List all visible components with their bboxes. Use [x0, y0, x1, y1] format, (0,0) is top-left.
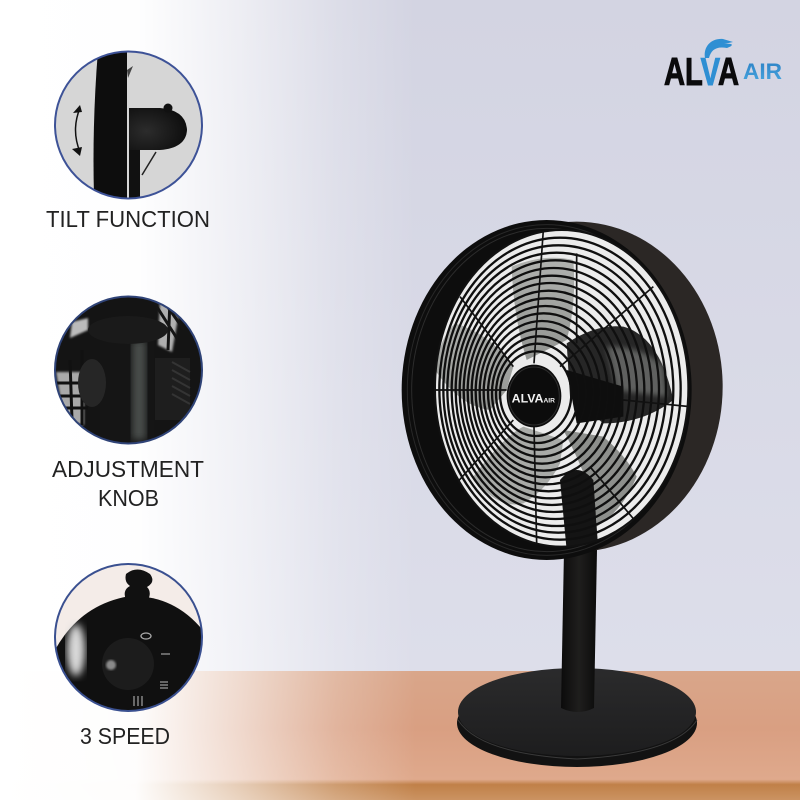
feature: tilt function: [46, 47, 210, 232]
label: 3 speed: 3 SPEED: [80, 723, 170, 749]
fan stem: [561, 550, 597, 712]
logo word ALVA: ALVA: [664, 51, 739, 94]
blade: bottom: [473, 427, 563, 504]
fan head: [402, 220, 723, 560]
fan grille rim: [435, 230, 688, 547]
logo word AIR: AIR: [743, 59, 782, 84]
icon: speed dial photo: [54, 563, 203, 712]
label: adjustment knob: [52, 456, 204, 511]
feature: 3 speed: [50, 564, 210, 749]
logo swoosh: [705, 39, 733, 58]
hub logo: ALVAAIR: [512, 392, 555, 406]
logo: Alva Air: [664, 39, 782, 94]
blade: lower right: [563, 430, 637, 527]
blade: top: [512, 258, 574, 360]
blade: left: [435, 323, 513, 410]
blade: right (shadowed): [567, 326, 673, 423]
feature: adjustment knob: [52, 296, 204, 511]
grille spokes: [430, 230, 690, 543]
icon: knob photo: [54, 296, 202, 445]
rear motor: [560, 470, 598, 550]
grille rings: [439, 238, 681, 540]
fan base: [457, 668, 697, 767]
label: adjustment knob: ADJUSTMENT: [52, 456, 204, 482]
fan rear housing: [431, 222, 723, 552]
fan hub: [507, 365, 561, 427]
product: fan: [402, 220, 723, 767]
icon: tilt photo: [54, 47, 202, 200]
label: tilt function: TILT FUNCTION: [46, 206, 210, 232]
fan grille and blades: [430, 230, 690, 550]
label: adjustment knob: KNOB: [98, 485, 159, 511]
background: wooden table: [0, 671, 800, 800]
icon: tilt arrows: [72, 105, 82, 156]
fan front ring: [402, 220, 692, 560]
